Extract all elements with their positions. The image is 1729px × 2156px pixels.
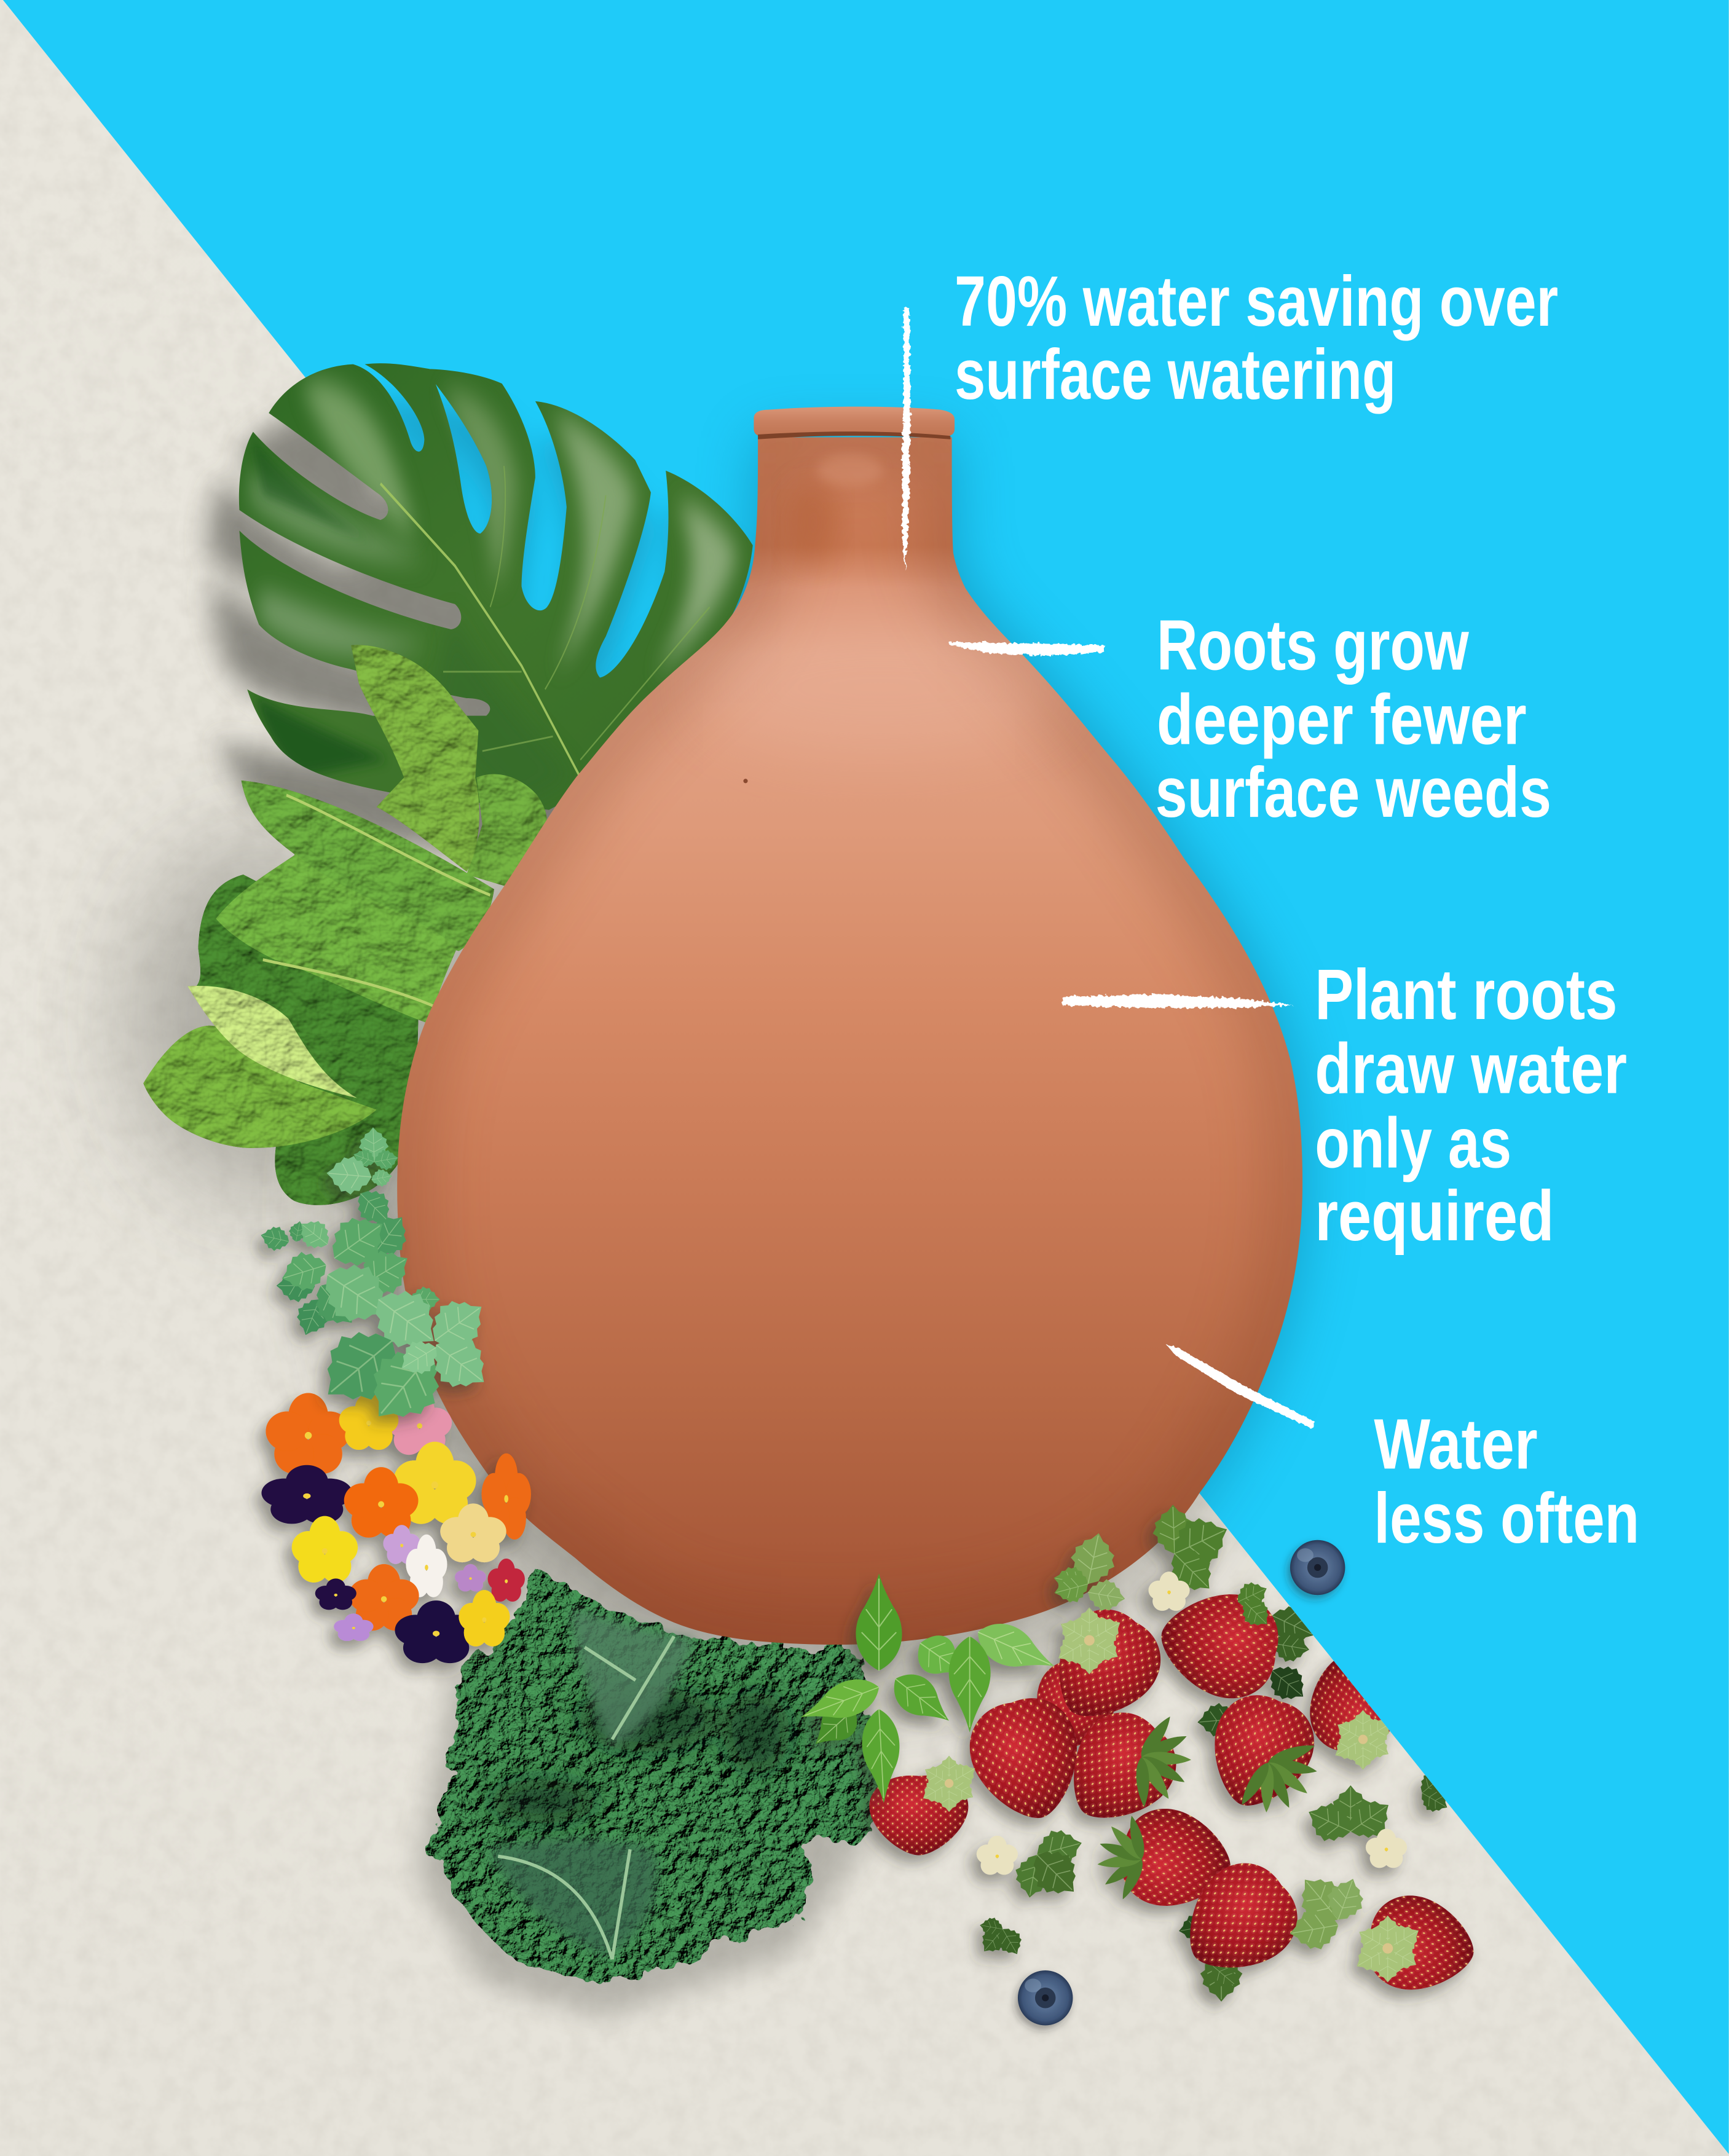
blueberry lower [1018, 1970, 1073, 2025]
strawberry blossoms [977, 1572, 1407, 1875]
pot lid [754, 407, 955, 436]
pot shading [397, 437, 1302, 1645]
text: plant roots draw water: Plant roots [1315, 954, 1617, 1034]
chalk line: water saving [902, 308, 910, 570]
text: plant roots draw water: required [1315, 1176, 1554, 1256]
lid groove [758, 431, 950, 439]
text: water saving: 70% water saving over [955, 261, 1558, 341]
kale veins [498, 1636, 674, 1959]
berry cluster [869, 1583, 1481, 2000]
text: water less often [1374, 1404, 1639, 1558]
chalk line: roots grow [949, 642, 1105, 656]
blueberry upper [1290, 1540, 1345, 1595]
text: water saving [955, 261, 1558, 414]
text: plant roots draw water: only as [1315, 1103, 1511, 1182]
terracotta pot [397, 407, 1302, 1645]
chalk line: plant roots [1062, 994, 1293, 1008]
pot body and neck [397, 437, 1302, 1645]
text: water saving: surface watering [955, 334, 1396, 414]
text: roots grow deeper [1156, 605, 1551, 832]
text: roots grow deeper: deeper fewer [1157, 679, 1527, 759]
kale flat leaf lower [489, 1839, 657, 1955]
lettuce lower leaves [143, 986, 377, 1148]
romaine lettuce back leaf [192, 875, 420, 1205]
basil sprig [795, 1573, 1062, 1804]
text: roots grow deeper: Roots grow [1157, 605, 1469, 685]
text: roots grow deeper: surface weeds [1156, 752, 1551, 832]
kale dark hollows [489, 1686, 790, 1824]
edible flowers [261, 1393, 531, 1663]
monstera leaf [239, 363, 753, 813]
text: plant roots draw water [1315, 954, 1627, 1256]
berry calyxes [916, 1607, 1426, 1983]
kale curly mass [431, 1567, 881, 1983]
cast shadows on paper [131, 410, 1264, 2017]
lettuce upper leaf cluster [216, 645, 547, 1025]
strawberries and leaves [869, 1504, 1481, 2002]
text: plant roots draw water: draw water [1315, 1029, 1627, 1109]
kale flat leaf upper [571, 1609, 695, 1746]
lettuce veins [263, 795, 490, 1007]
mint sprig [258, 1127, 500, 1439]
strawberry foliage [975, 1504, 1453, 2002]
pot shadow on blue [386, 388, 1331, 1516]
chalk line: water less often [1167, 1345, 1315, 1428]
kale [431, 1567, 881, 1983]
text: water less often: less often [1374, 1478, 1639, 1558]
text: water less often: Water [1374, 1404, 1538, 1484]
leaves over berries [1050, 1528, 1371, 1954]
